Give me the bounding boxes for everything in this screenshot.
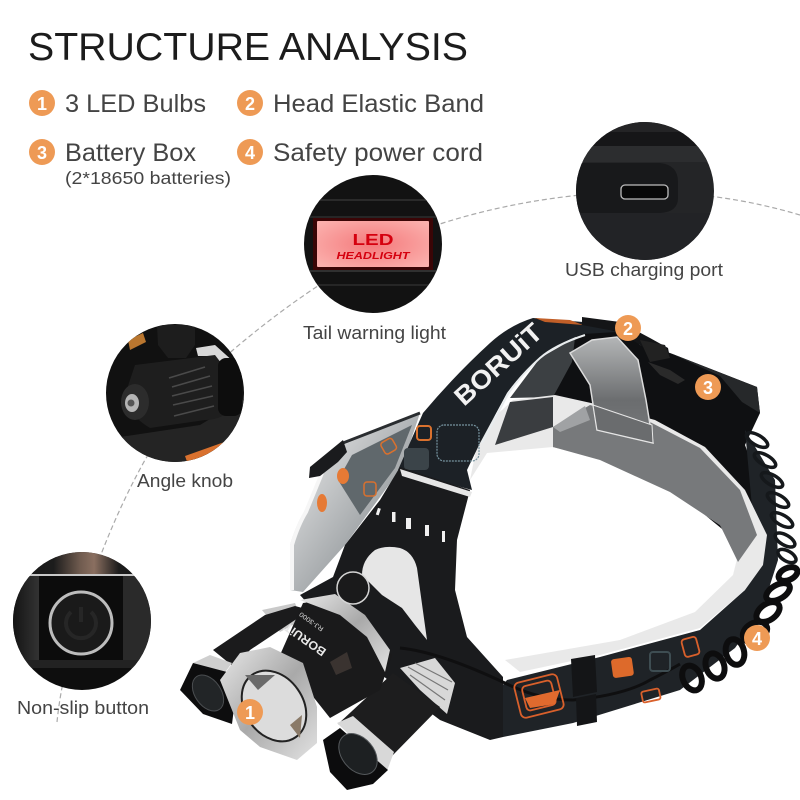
lower strap orange patterns xyxy=(513,636,700,719)
label: tail warning light: Tail warning light xyxy=(303,323,446,343)
plate slots xyxy=(376,508,445,542)
battery box xyxy=(553,318,772,560)
legend item 4: Safety power cord xyxy=(273,139,483,167)
badge 4 on headlamp: 4 xyxy=(752,629,762,649)
side clip, left xyxy=(309,440,347,478)
cable xyxy=(400,648,680,700)
strap patterns xyxy=(437,425,479,461)
legend item 1: 3 LED Bulbs xyxy=(65,90,206,118)
legend item 4: 4 xyxy=(245,143,255,163)
cable clips xyxy=(571,655,597,697)
lamp brand text: BORUiT xyxy=(281,620,329,659)
badge 3 on headlamp xyxy=(695,374,721,400)
power button xyxy=(337,572,369,604)
rear strap, outer dark xyxy=(490,430,778,737)
top head strap xyxy=(398,318,617,490)
front-left strap with clear lining xyxy=(290,413,420,592)
plate window xyxy=(362,547,427,640)
badge 3 on headlamp: 3 xyxy=(703,378,713,398)
legend xyxy=(29,90,484,188)
callout: non-slip button xyxy=(10,550,155,690)
clear curved bracket xyxy=(570,337,653,443)
center lamp body xyxy=(280,598,392,718)
callout: angle knob xyxy=(106,324,244,462)
right lamp xyxy=(400,658,455,714)
badge 1 on headlamp: 1 xyxy=(245,703,255,723)
lamp model text: RJ-3000 xyxy=(298,610,325,632)
legend item 3: Battery Box xyxy=(65,139,196,167)
badge 2 on headlamp xyxy=(615,315,641,341)
label: non-slip button: Non-slip button xyxy=(17,698,149,718)
center lamp bezel xyxy=(220,647,317,760)
badge 2 on headlamp: 2 xyxy=(623,319,633,339)
legend item 3: 3 xyxy=(37,143,47,163)
callout: USB charging port xyxy=(576,122,714,260)
title: STRUCTURE ANALYSIS xyxy=(28,26,468,69)
label: USB charging port: USB charging port xyxy=(565,260,723,280)
callout: tail warning light: LED xyxy=(352,232,394,249)
coil cord xyxy=(678,564,800,694)
legend item 2: 2 xyxy=(245,94,255,114)
dark clear patch under strap xyxy=(510,338,575,398)
legend item 1: 1 xyxy=(37,94,47,114)
callout: tail warning light xyxy=(300,175,450,313)
left lamp xyxy=(262,603,302,632)
label: angle knob: Angle knob xyxy=(137,471,233,491)
legend item 3 xyxy=(29,139,231,188)
front plate xyxy=(300,467,503,740)
lamp window marks xyxy=(330,652,352,675)
badge 1 on headlamp xyxy=(237,699,263,725)
strap brand text: BORUiT xyxy=(448,317,548,411)
dashed connector arc xyxy=(57,192,800,722)
elastic buckle xyxy=(582,317,670,358)
callout: tail warning light: HEADLIGHT xyxy=(336,251,411,262)
headlamp xyxy=(180,317,800,790)
rear strap, clear lining xyxy=(470,395,767,672)
legend item 3: (2*18650 batteries) xyxy=(65,168,231,188)
badge 4 on headlamp xyxy=(744,625,770,651)
legend item 2: Head Elastic Band xyxy=(273,90,484,118)
